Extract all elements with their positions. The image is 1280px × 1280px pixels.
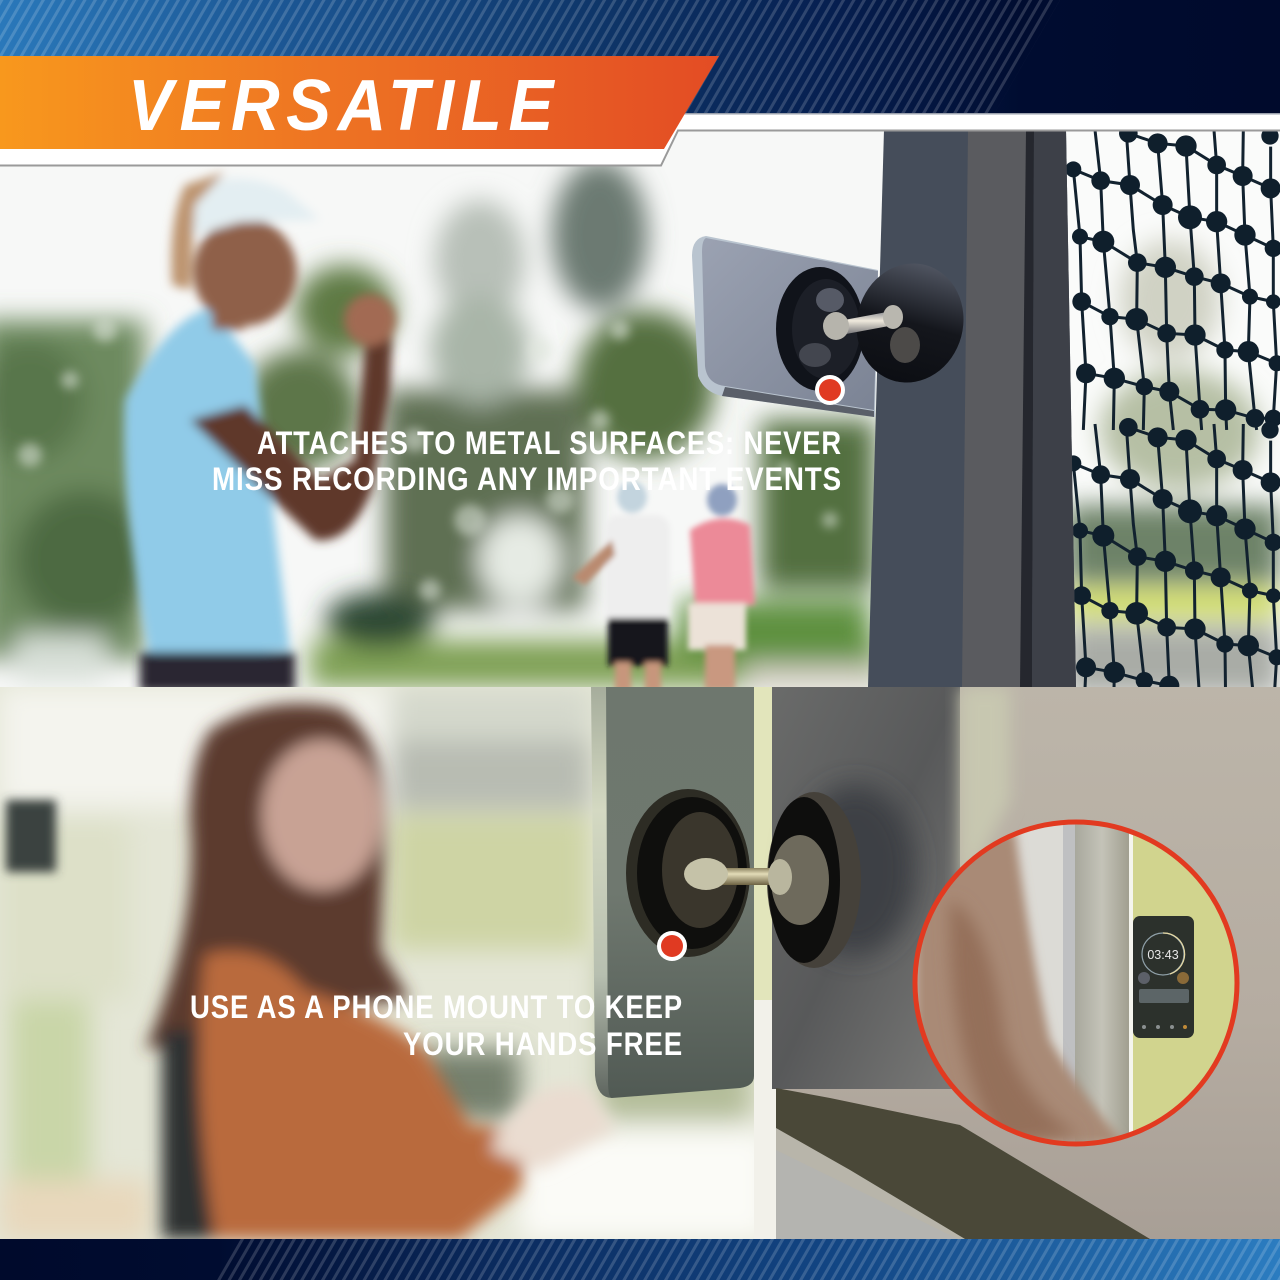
phone screen with timer: 03:43 bbox=[1147, 948, 1179, 962]
blurred background foliage bbox=[0, 160, 880, 691]
text: caption bottom: USE AS A PHONE MOUNT TO KEEP bbox=[190, 989, 683, 1025]
bokeh highlights bbox=[18, 318, 838, 601]
blurred woman with visor bbox=[124, 172, 396, 692]
text: caption top bbox=[214, 431, 840, 490]
phone on magnetic mount, bottom bbox=[591, 687, 861, 1098]
text: caption bottom: YOUR HANDS FREE bbox=[403, 1026, 683, 1062]
phone on magnetic mount, top bbox=[692, 236, 977, 417]
footer band bbox=[0, 1239, 1280, 1280]
blurred players bbox=[572, 481, 755, 692]
blurred woman with long hair bbox=[145, 703, 615, 1239]
phone screen with timer bbox=[1133, 916, 1194, 1038]
text: caption top: MISS RECORDING ANY IMPORTANT EVENTS bbox=[212, 461, 842, 497]
text: caption top: ATTACHES TO METAL SURFACES: NEVER bbox=[257, 425, 842, 461]
fence post bbox=[868, 130, 1076, 687]
blurred hair bbox=[915, 830, 1125, 1144]
text: caption bottom bbox=[192, 995, 682, 1056]
inset circle: phone on fridge bbox=[915, 822, 1243, 1144]
net background bbox=[1060, 130, 1280, 687]
header band bbox=[0, 0, 1280, 114]
blurred background bbox=[0, 687, 770, 1240]
net mesh bbox=[1065, 124, 1280, 724]
refrigerator bbox=[754, 687, 1280, 1239]
banner: VERSATILE: VERSATILE bbox=[128, 66, 560, 146]
white notch stripe below header bbox=[0, 113, 1280, 166]
photo panel: tennis court fence bbox=[0, 124, 1280, 724]
banner: VERSATILE bbox=[0, 56, 719, 149]
photo panel: fridge bbox=[0, 687, 1280, 1240]
